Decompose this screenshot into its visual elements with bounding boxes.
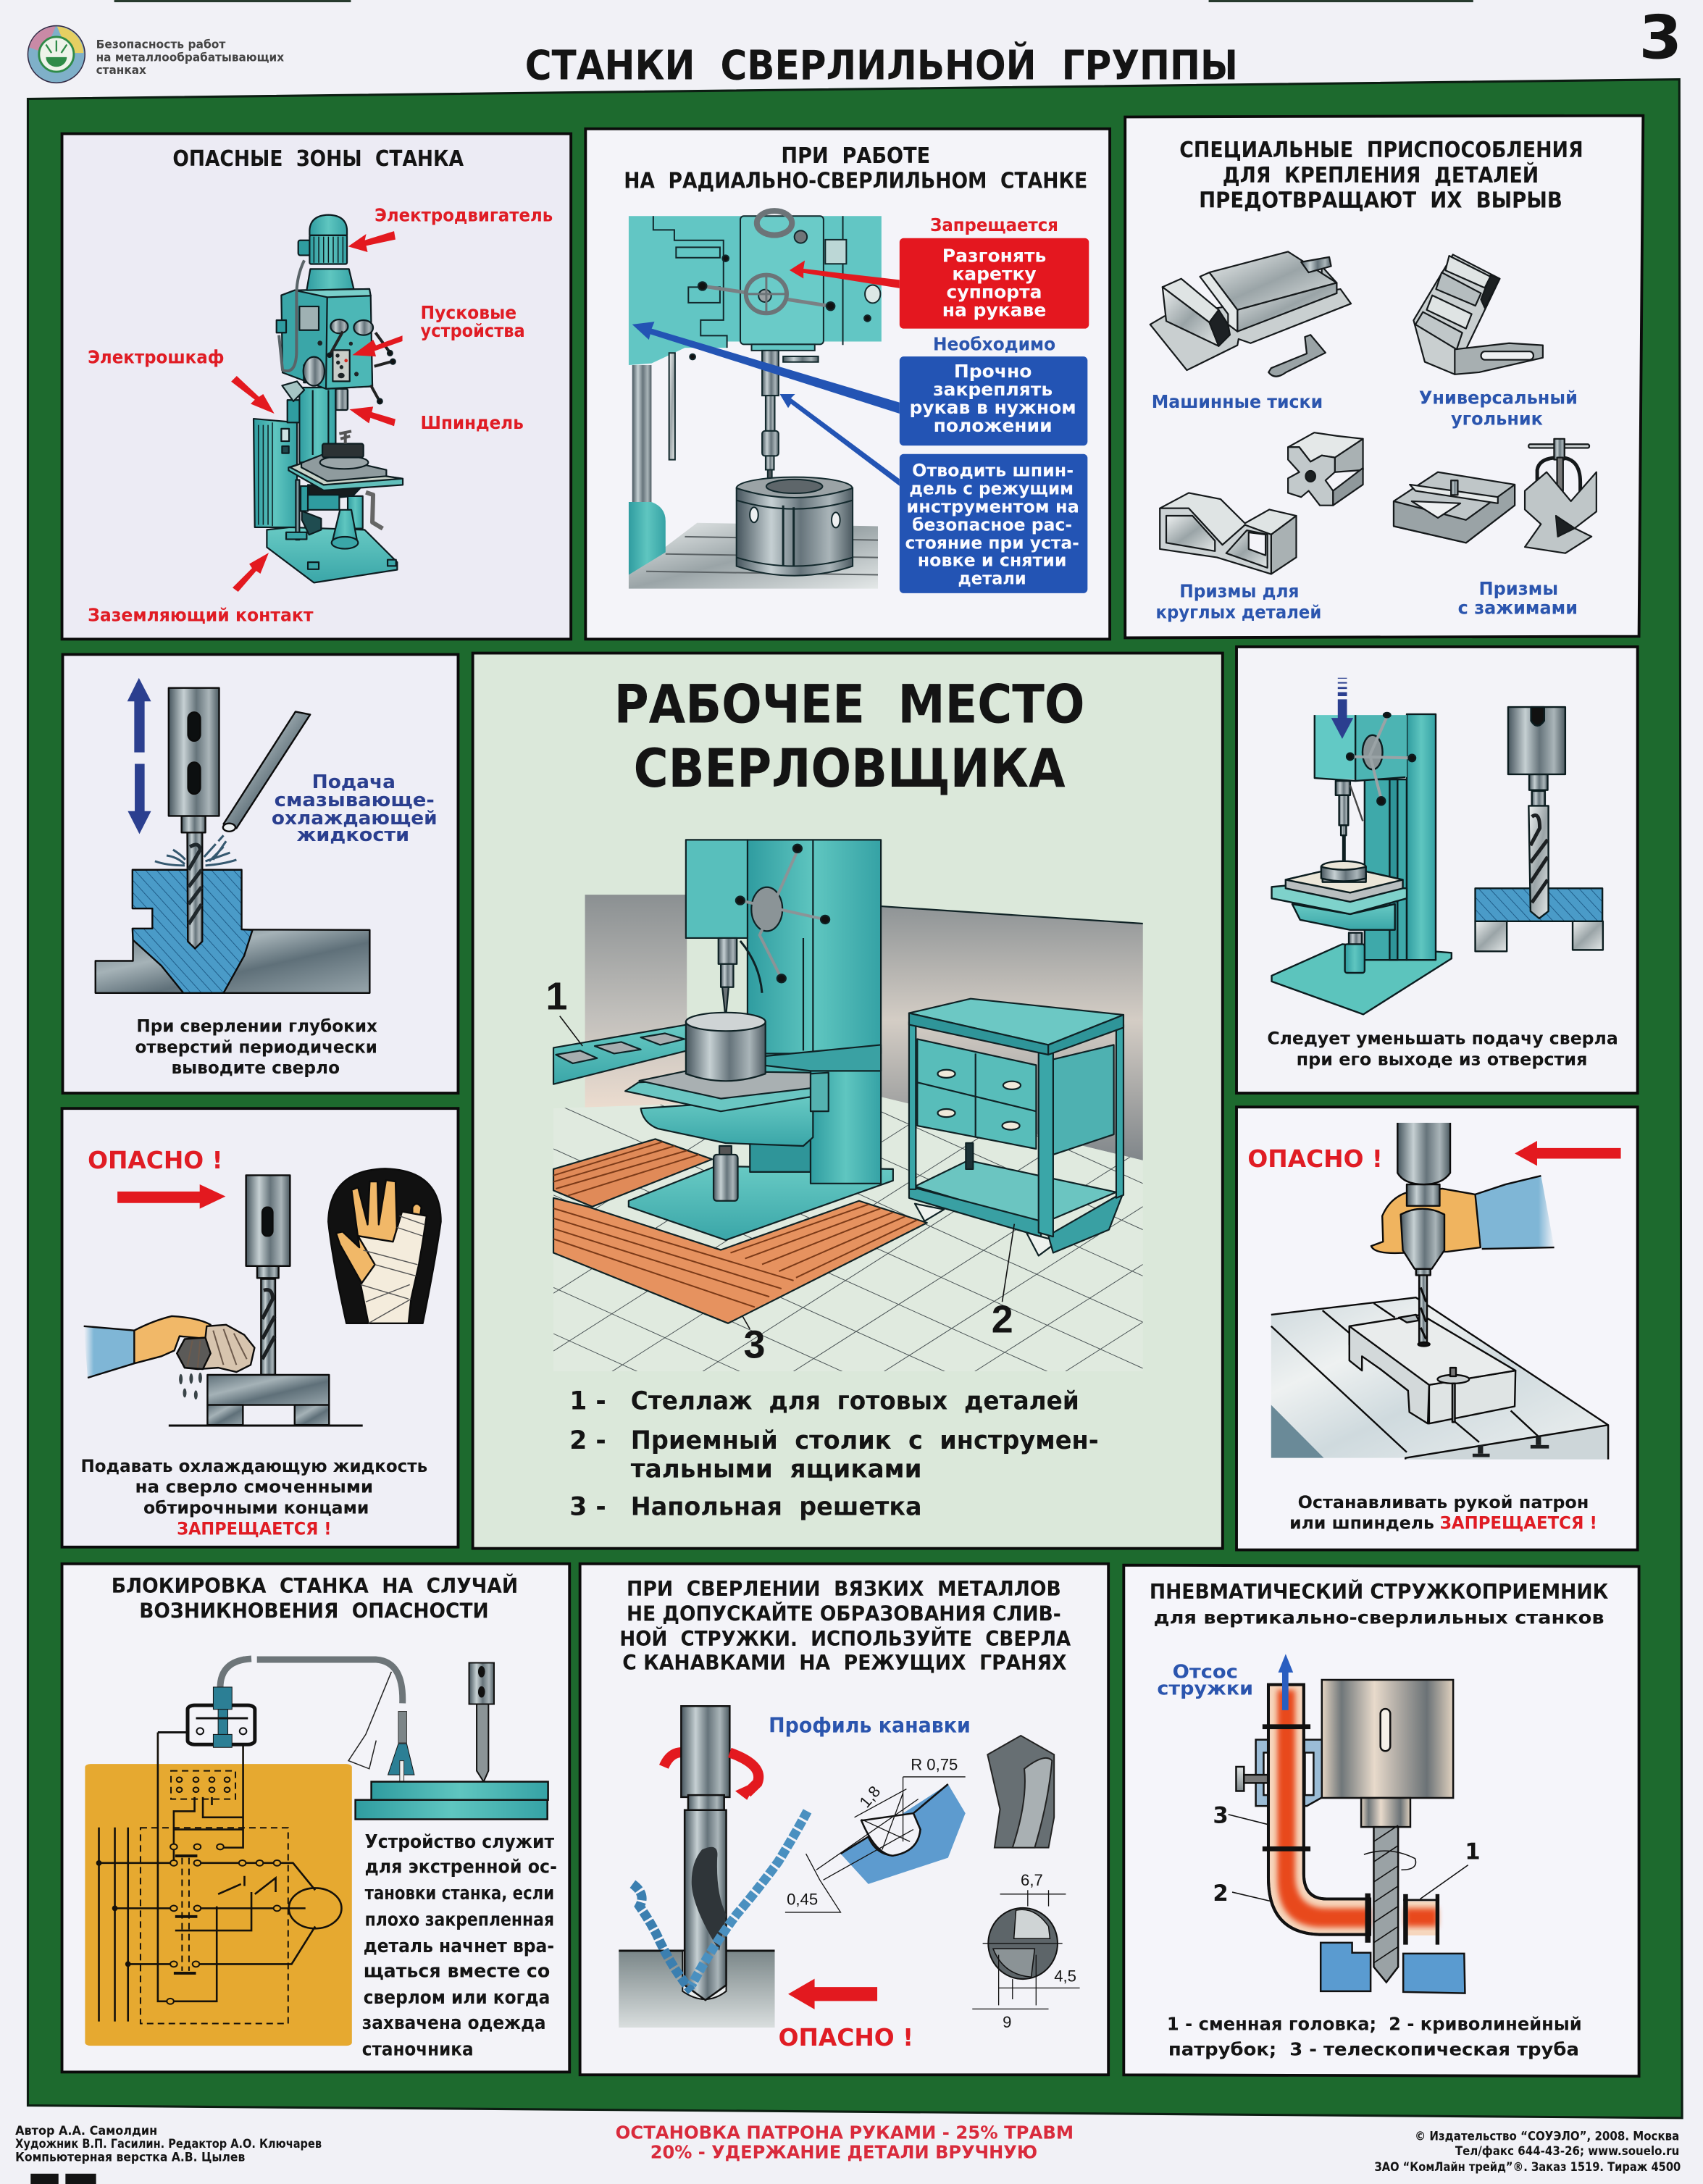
coolant label bbox=[272, 771, 438, 846]
blue box 2: безопасное рас- bbox=[912, 514, 1072, 535]
description text: Устройство служит bbox=[365, 1831, 554, 1853]
top edge marks bbox=[114, 0, 1473, 2]
heading: НОЙ СТРУЖКИ. ИСПОЛЬЗУЙТЕ СВЕРЛА bbox=[619, 1626, 1071, 1651]
description text: щаться вместе со bbox=[364, 1961, 550, 1983]
icon: machine vise bbox=[1150, 251, 1351, 377]
blue box 1 bbox=[900, 356, 1087, 445]
description text bbox=[362, 1831, 557, 2060]
panel: emergency interlock bbox=[62, 1564, 569, 2072]
caption: ЗАПРЕЩАЕТСЯ ! bbox=[1440, 1513, 1597, 1534]
blue captions: Универсальный bbox=[1419, 387, 1578, 408]
heading: СПЕЦИАЛЬНЫЕ ПРИСПОСОБЛЕНИЯ bbox=[1179, 138, 1583, 163]
coolant label: жидкости bbox=[296, 824, 409, 846]
footer credits: Художник В.П. Гасилин. Редактор А.О. Ключарев bbox=[15, 2137, 322, 2151]
drill photo profile bbox=[987, 1736, 1054, 1848]
footer statistic bbox=[616, 2122, 1074, 2163]
fixtures illustrations bbox=[1150, 251, 1597, 574]
panel: special fixtures bbox=[1125, 116, 1643, 637]
blue box 2: детали bbox=[958, 568, 1026, 588]
icon: clamped plate bbox=[1394, 472, 1515, 543]
spindle, chuck and drill bbox=[1397, 1123, 1450, 1346]
blue box 2 bbox=[900, 454, 1087, 593]
reduce feed illustration bbox=[1272, 678, 1603, 1014]
floor grating bbox=[553, 1139, 927, 1323]
caption: Останавливать рукой патрон bbox=[1298, 1492, 1589, 1513]
necessary label: Необходимо bbox=[933, 333, 1055, 354]
workpiece base bbox=[96, 929, 369, 993]
limit switch and cable bbox=[158, 1659, 548, 1820]
red arrow bbox=[1515, 1141, 1621, 1166]
callout numbers: 2 bbox=[992, 1298, 1013, 1342]
caption bbox=[1289, 1492, 1597, 1534]
footer publisher: Тел/факс 644-43-26; www.souelo.ru bbox=[1455, 2144, 1679, 2158]
red labels: Электродвигатель bbox=[375, 205, 553, 226]
spindle and drill bbox=[188, 832, 202, 948]
heading bbox=[614, 674, 1084, 800]
groove profile bbox=[785, 1736, 1080, 2009]
workpiece section bbox=[133, 870, 253, 993]
machine table bbox=[1271, 1297, 1608, 1460]
red box: суппорта bbox=[947, 281, 1042, 302]
heading: НЕ ДОПУСКАЙТЕ ОБРАЗОВАНИЯ СЛИВ- bbox=[627, 1602, 1061, 1626]
red labels: Шпиндель bbox=[421, 412, 524, 433]
danger illustration bbox=[84, 1168, 441, 1426]
red labels: Пусковые bbox=[421, 302, 516, 323]
description text: деталь начнет вра- bbox=[364, 1936, 554, 1957]
red box: Разгонять bbox=[942, 245, 1046, 266]
legend: 1 - bbox=[569, 1386, 606, 1415]
description text: сверлом или когда bbox=[364, 1987, 550, 2009]
callout numbers: 3 bbox=[744, 1323, 765, 1366]
drill end section bbox=[988, 1908, 1058, 1979]
subheading: для вертикально-сверлильных станков bbox=[1154, 1607, 1604, 1628]
caption: на сверло смоченными bbox=[135, 1477, 373, 1497]
callout numbers bbox=[546, 975, 1013, 1366]
section illustration bbox=[96, 678, 369, 993]
callout numbers: 3 bbox=[1213, 1802, 1229, 1828]
heading: ПРИ РАБОТЕ bbox=[781, 143, 930, 169]
caption bbox=[80, 1456, 427, 1539]
legend: патрубок; 3 - телескопическая труба bbox=[1168, 2038, 1579, 2059]
caption: при его выходе из отверстия bbox=[1297, 1050, 1587, 1070]
blue box 2: инструментом на bbox=[906, 496, 1079, 516]
suction label bbox=[1157, 1661, 1253, 1699]
heading: НА РАДИАЛЬНО-СВЕРЛИЛЬНОМ СТАНКЕ bbox=[624, 169, 1087, 194]
blue box 2: Отводить шпин- bbox=[912, 460, 1074, 480]
drilling machine bbox=[625, 840, 893, 1240]
legend: Стеллаж для готовых деталей bbox=[631, 1386, 1079, 1415]
blue box 1: Прочно bbox=[954, 361, 1032, 382]
heading bbox=[619, 1576, 1071, 1675]
description text: станочника bbox=[362, 2038, 474, 2060]
legend: тальными ящиками bbox=[631, 1455, 922, 1484]
heading: РАБОЧЕЕ МЕСТО bbox=[614, 674, 1084, 736]
blue captions: Призмы для bbox=[1179, 581, 1300, 602]
red box: на рукаве bbox=[942, 299, 1046, 320]
dimension labels bbox=[787, 1755, 1076, 2031]
pointer arrows bbox=[632, 260, 900, 486]
icon: hollow prism bbox=[1160, 493, 1297, 574]
dimension labels: 6,7 bbox=[1021, 1871, 1043, 1889]
footer statistic: 20% - УДЕРЖАНИЕ ДЕТАЛИ ВРУЧНУЮ bbox=[650, 2142, 1037, 2163]
blue captions: Машинные тиски bbox=[1152, 391, 1323, 412]
heading bbox=[624, 143, 1087, 194]
drill press illustration bbox=[254, 215, 403, 582]
legend: Напольная решетка bbox=[631, 1493, 922, 1522]
blue captions bbox=[1152, 387, 1578, 623]
arrows bbox=[231, 231, 403, 592]
callout numbers bbox=[1213, 1802, 1481, 1907]
heading: ПРЕДОТВРАЩАЮТ ИХ ВЫРЫВ bbox=[1199, 188, 1562, 213]
panel: radial drilling machine bbox=[585, 129, 1110, 639]
icon: double arrow bbox=[127, 678, 151, 834]
blue captions: угольник bbox=[1451, 408, 1543, 429]
red labels bbox=[88, 205, 553, 625]
red arrow bbox=[117, 1184, 225, 1209]
panel: reduce feed bbox=[1237, 647, 1638, 1093]
coolant splash bbox=[155, 835, 236, 866]
shelf rack bbox=[553, 1025, 687, 1084]
dimension labels: 0,45 bbox=[787, 1891, 818, 1909]
caption: ЗАПРЕЩАЕТСЯ ! bbox=[177, 1518, 332, 1539]
panel: operator workplace bbox=[471, 652, 1224, 1550]
heading bbox=[1179, 138, 1583, 213]
drilling machine bbox=[1272, 713, 1452, 1014]
blue box 2: новке и снятии bbox=[918, 550, 1066, 570]
header series text: станках bbox=[96, 63, 146, 77]
callout numbers: 1 bbox=[546, 975, 567, 1018]
radial drill illustration bbox=[629, 211, 882, 589]
footer credits bbox=[15, 2124, 322, 2164]
legend: 2 - bbox=[569, 1426, 606, 1455]
heading: ПНЕВМАТИЧЕСКИЙ СТРУЖКОПРИЕМНИК bbox=[1150, 1579, 1609, 1604]
clamped workpiece bbox=[1350, 1315, 1515, 1423]
prohibited label: Запрещается bbox=[930, 214, 1058, 235]
dimension labels: 1,8 bbox=[855, 1783, 884, 1811]
caption: выводите сверло bbox=[171, 1058, 340, 1078]
dimension labels: 9 bbox=[1003, 2013, 1011, 2031]
panel: dangerous zones bbox=[62, 134, 571, 639]
header logo bbox=[28, 26, 85, 83]
legend: 1 - сменная головка; 2 - криволинейный bbox=[1167, 2014, 1582, 2035]
header series text: на металлообрабатывающих bbox=[96, 51, 284, 64]
coolant label: смазывающе- bbox=[275, 790, 435, 811]
danger label: ОПАСНО ! bbox=[1247, 1145, 1383, 1173]
footer statistic: ОСТАНОВКА ПАТРОНА РУКАМИ - 25% ТРАВМ bbox=[616, 2122, 1074, 2143]
blue captions: с зажимами bbox=[1458, 598, 1578, 619]
panel: pneumatic chip collector bbox=[1124, 1565, 1639, 2076]
panel: deep hole drilling bbox=[63, 655, 458, 1093]
hand with rag bbox=[84, 1316, 254, 1378]
description text: плохо закрепленная bbox=[365, 1909, 554, 1931]
circuit diagram on yellow bbox=[85, 1733, 352, 2046]
heading: БЛОКИРОВКА СТАНКА НА СЛУЧАЙ bbox=[112, 1573, 518, 1598]
red box bbox=[900, 238, 1089, 329]
icon: clamped prism bbox=[1525, 439, 1597, 553]
heading: СВЕРЛОВЩИКА bbox=[634, 738, 1066, 800]
dimension labels: 4,5 bbox=[1054, 1967, 1076, 1985]
blue box 2: дель с режущим bbox=[909, 478, 1074, 498]
callout numbers: 2 bbox=[1213, 1880, 1229, 1907]
heading: С КАНАВКАМИ НА РЕЖУЩИХ ГРАНЯХ bbox=[622, 1650, 1066, 1675]
header series text: Безопасность работ bbox=[96, 37, 226, 51]
chip collector diagram bbox=[1229, 1654, 1468, 1993]
legend: Приемный столик с инструмен- bbox=[631, 1426, 1099, 1455]
footer credits: Автор А.А. Самолдин bbox=[15, 2124, 157, 2138]
footer publisher: © Издательство “СОУЭЛО”, 2008. Москва bbox=[1415, 2130, 1679, 2143]
red box: каретку bbox=[952, 263, 1037, 284]
description text: захвачена одежда bbox=[362, 2012, 546, 2034]
blue box 2: стояние при уста- bbox=[905, 532, 1079, 553]
blue captions: Призмы bbox=[1479, 578, 1558, 599]
drips bbox=[179, 1373, 202, 1399]
description text: тановки станка, если bbox=[365, 1883, 554, 1904]
heading: ВОЗНИКНОВЕНИЯ ОПАСНОСТИ bbox=[139, 1599, 489, 1623]
workpiece bbox=[169, 1375, 363, 1426]
footer publisher bbox=[1374, 2130, 1681, 2174]
spindle and drill bbox=[246, 1175, 290, 1375]
icon: universal angle bbox=[1413, 254, 1543, 375]
caption: Подавать охлаждающую жидкость bbox=[80, 1456, 427, 1476]
bottom-left print mark bbox=[30, 2174, 96, 2184]
panel: viscous metals drilling bbox=[580, 1564, 1108, 2075]
legend: 3 - bbox=[569, 1493, 606, 1522]
caption: отверстий периодически bbox=[135, 1037, 377, 1057]
description text: для экстренной ос- bbox=[365, 1857, 557, 1878]
red arrow bbox=[788, 1979, 877, 2009]
footer credits: Компьютерная верстка А.В. Цылев bbox=[15, 2150, 245, 2164]
caption: При сверлении глубоких bbox=[136, 1016, 377, 1036]
caption: Следует уменьшать подачу сверла bbox=[1267, 1029, 1618, 1049]
chuck illustration bbox=[1271, 1123, 1621, 1460]
heading: ПРИ СВЕРЛЕНИИ ВЯЗКИХ МЕТАЛЛОВ bbox=[627, 1576, 1061, 1601]
dimension labels: R 0,75 bbox=[911, 1755, 958, 1773]
coolant label: Подача bbox=[312, 771, 396, 793]
sheet number: 3 bbox=[1639, 4, 1682, 73]
blue captions: круглых деталей bbox=[1156, 602, 1321, 623]
drill exit section bbox=[1476, 707, 1603, 951]
icon: bandaged hand bbox=[328, 1168, 441, 1323]
blue box 1: закреплять bbox=[933, 379, 1053, 400]
danger label: ОПАСНО ! bbox=[88, 1147, 223, 1174]
panel: do not stop chuck by hand bbox=[1237, 1107, 1638, 1550]
workplace illustration bbox=[552, 839, 1143, 1371]
icon: prism block bbox=[1288, 432, 1363, 506]
red labels: Заземляющий контакт bbox=[88, 604, 314, 625]
callout numbers: 1 bbox=[1465, 1838, 1481, 1865]
caption bbox=[1267, 1029, 1618, 1070]
coolant tube bbox=[224, 711, 310, 828]
suction label: стружки bbox=[1157, 1678, 1253, 1699]
legend bbox=[1167, 2014, 1582, 2059]
danger label: ОПАСНО ! bbox=[779, 2024, 913, 2051]
blue box 1: рукав в нужном bbox=[909, 397, 1076, 418]
header series text bbox=[96, 37, 284, 77]
panel: danger coolant by rag bbox=[62, 1108, 458, 1547]
leader lines bbox=[560, 1016, 1014, 1329]
suction label: Отсос bbox=[1173, 1661, 1238, 1683]
legend bbox=[569, 1386, 1099, 1522]
blue box 1: положении bbox=[934, 415, 1053, 436]
main title: СТАНКИ СВЕРЛИЛЬНОЙ ГРУППЫ bbox=[525, 42, 1238, 90]
heading bbox=[112, 1573, 518, 1623]
dashed feed arrow bbox=[1331, 678, 1353, 739]
heading: ДЛЯ КРЕПЛЕНИЯ ДЕТАЛЕЙ bbox=[1223, 162, 1539, 188]
profile label: Профиль канавки bbox=[769, 1712, 971, 1737]
gloveless hand and sleeve bbox=[1371, 1176, 1555, 1253]
coolant label: охлаждающей bbox=[272, 808, 438, 829]
heading: ОПАСНЫЕ ЗОНЫ СТАНКА bbox=[172, 146, 464, 172]
tool cabinet bbox=[909, 999, 1124, 1255]
caption: обтирочными концами bbox=[143, 1498, 369, 1518]
caption: или шпиндель bbox=[1289, 1513, 1434, 1534]
red labels: Электрошкаф bbox=[88, 347, 224, 368]
caption bbox=[135, 1016, 377, 1078]
drill and chips bbox=[619, 1706, 808, 2028]
red labels: устройства bbox=[421, 320, 525, 341]
